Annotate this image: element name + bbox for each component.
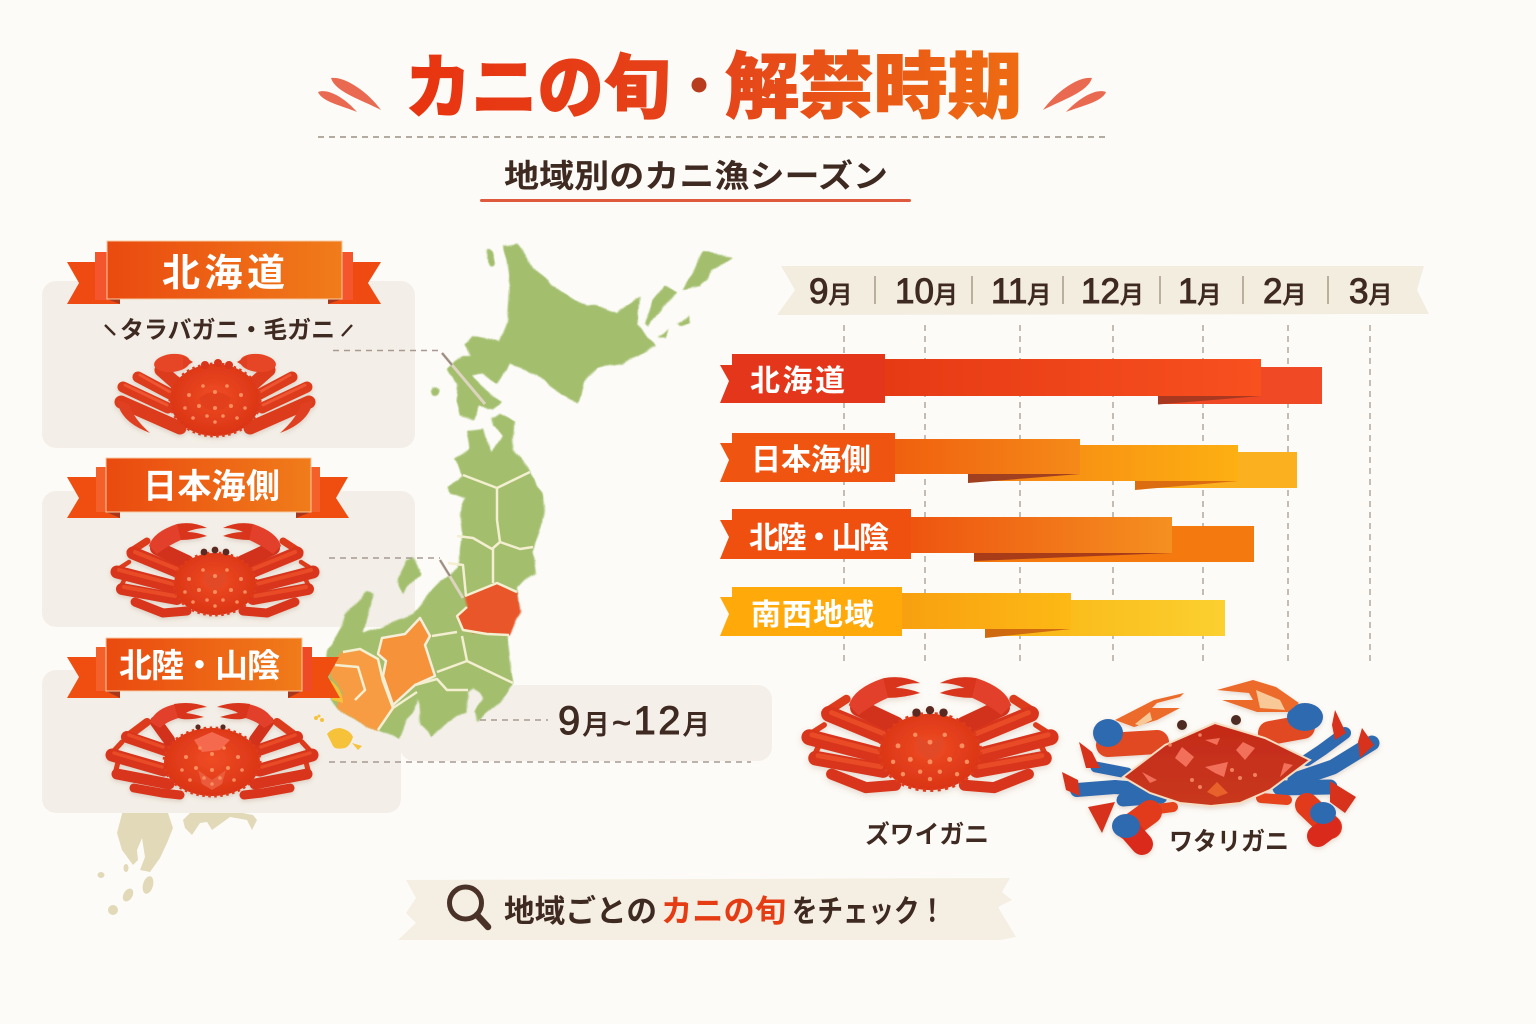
title: カニの旬 (405, 49, 670, 127)
ribbon: Hokuriku San'in (67, 638, 340, 698)
month header banner: 2月 (1263, 272, 1306, 311)
icon: magnifying glass (450, 887, 488, 927)
icon: snow crab small (115, 523, 315, 615)
title: 解禁時期 (725, 48, 1022, 128)
ribbon: Sea of Japan side: 日本海側 (143, 468, 280, 506)
bar: Southwest season: 南西地域 (751, 599, 874, 632)
panel: Hokuriku San'in card (42, 670, 401, 813)
yellow western islands (314, 680, 362, 750)
bar: Southwest season (720, 587, 1225, 638)
highlighted region: red (457, 583, 520, 635)
subtitle: 地域別のカニ漁シーズン (504, 158, 888, 194)
icon: snow crab (Zuwai) (807, 677, 1053, 790)
highlighted region: Chubu orange (378, 618, 435, 705)
icon: blue swimming crab (Watari) (1062, 680, 1374, 844)
subtitle (480, 158, 911, 202)
month header banner (777, 266, 1429, 315)
bar: Sea of Japan season: 日本海側 (751, 444, 871, 477)
ribbon: Hokuriku San'in: 北陸・山陰 (119, 647, 280, 684)
Sado island (397, 558, 422, 594)
month header banner: 9月 (809, 272, 852, 311)
highlighted region: Kansai orange (331, 649, 393, 731)
title (318, 48, 1106, 128)
chart grid lines (844, 325, 1370, 662)
month header banner: 3月 (1349, 272, 1392, 311)
faded Kyushu and Shikoku map fragment (98, 810, 257, 915)
label: crab species in Hokkaido: タラバガニ・毛ガニ (120, 317, 335, 344)
icon: king crab (117, 352, 313, 436)
dashed connectors (329, 350, 751, 762)
bar: Hokkaido season (720, 354, 1322, 404)
bar: Hokuriku San'in season: 北陸・山陰 (749, 522, 889, 555)
title swoosh left (318, 78, 381, 112)
title swoosh right (1043, 78, 1106, 112)
panel: Hokkaido card (42, 281, 415, 448)
bottom callout banner: をチェック！ (792, 894, 945, 929)
bar: Hokuriku San'in season (720, 509, 1254, 562)
bottom callout banner: カニの旬 (661, 894, 786, 929)
month header banner: 12月 (1081, 272, 1144, 311)
panel: Sea of Japan card (42, 491, 415, 627)
bar: Sea of Japan season (720, 433, 1297, 490)
Honshu (327, 414, 545, 739)
month header banner: 1月 (1178, 272, 1221, 311)
bottom callout banner: 地域ごとの (504, 894, 657, 929)
ribbon: Sea of Japan side (67, 458, 349, 518)
label: September to December period: 9月~12月 (558, 699, 710, 743)
ribbon: Hokkaido: 北海道 (162, 253, 285, 295)
icon: red crab Hokuriku (110, 703, 314, 796)
strait and callout lines (440, 353, 485, 598)
label: Watari crab: ワタリガニ (1169, 828, 1289, 856)
month header banner: 10月 (895, 272, 958, 311)
bar: Hokkaido season: 北海道 (750, 365, 845, 398)
bottom callout banner (398, 878, 1016, 940)
ribbon: Hokkaido (67, 241, 381, 304)
month header banner: 11月 (991, 272, 1051, 311)
panel: season period callout (400, 685, 772, 761)
label: Zuwai crab: ズワイガニ (865, 820, 989, 849)
map of Japan (314, 243, 733, 750)
Hokkaido (431, 243, 733, 420)
